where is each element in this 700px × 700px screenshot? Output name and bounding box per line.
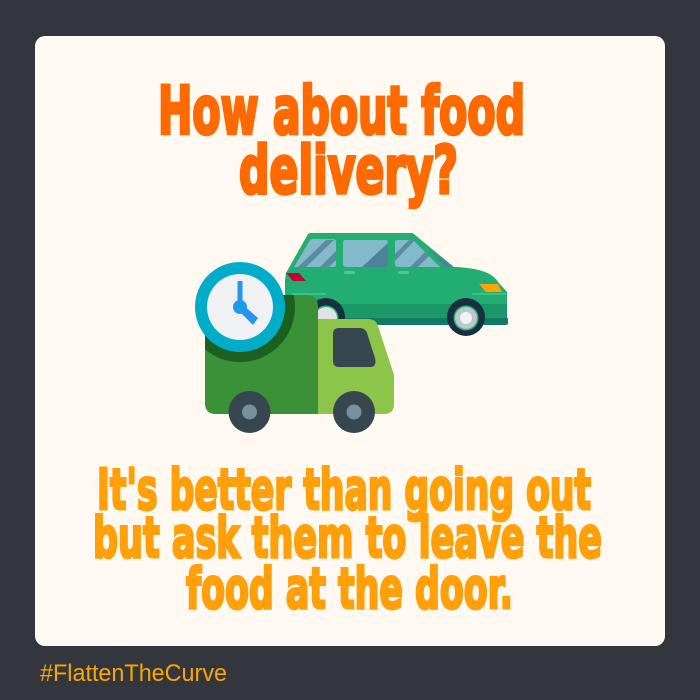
icon: clock	[195, 262, 285, 352]
illustration: car and delivery truck with clock	[185, 233, 508, 433]
body text	[93, 458, 602, 622]
panel: cream card	[35, 36, 665, 646]
icon: green car	[285, 233, 508, 336]
icon: truck front wheel	[333, 391, 375, 433]
icon: car front wheel	[447, 298, 485, 336]
hashtag: #FlattenTheCurve	[40, 660, 227, 687]
icon: car rear wheel	[307, 298, 345, 336]
title	[158, 72, 525, 209]
icon: delivery truck	[205, 295, 394, 433]
title: delivery?	[239, 132, 458, 209]
icon: truck rear wheel	[228, 391, 270, 433]
